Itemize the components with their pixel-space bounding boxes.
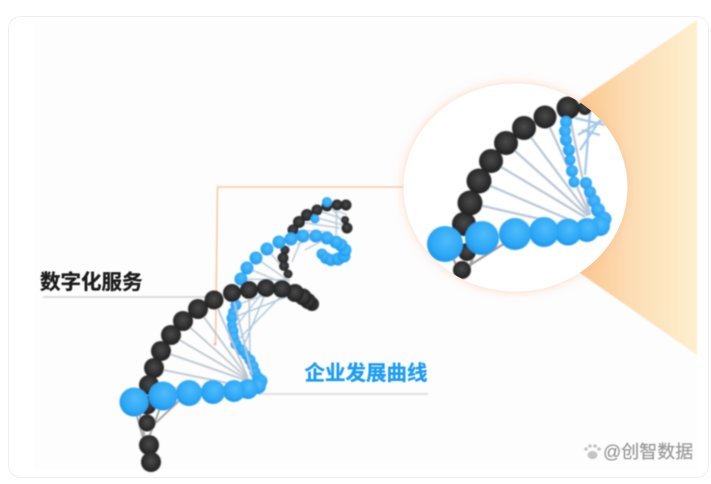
main black strand xyxy=(138,279,319,472)
upper rungs xyxy=(232,202,347,360)
enlarged blue strand xyxy=(427,116,612,262)
watermark: @创智数据 xyxy=(603,442,693,462)
enlarged black strand xyxy=(452,96,592,279)
label: 企业发展曲线: 企业发展曲线 xyxy=(304,361,428,385)
icon: paw xyxy=(584,444,601,459)
magnification cone xyxy=(580,20,697,355)
magnifier lens xyxy=(404,84,628,292)
enlarged rungs xyxy=(450,108,606,278)
main blue strand xyxy=(120,374,268,416)
label: 数字化服务: 数字化服务 xyxy=(40,270,142,294)
mid blue strand xyxy=(226,300,264,384)
lower rungs xyxy=(134,293,252,462)
enlarged DNA helix xyxy=(427,96,612,279)
upper blue strand xyxy=(234,197,352,286)
upper black strand xyxy=(278,200,352,278)
connector lines xyxy=(43,187,428,394)
small DNA helix xyxy=(120,197,352,472)
